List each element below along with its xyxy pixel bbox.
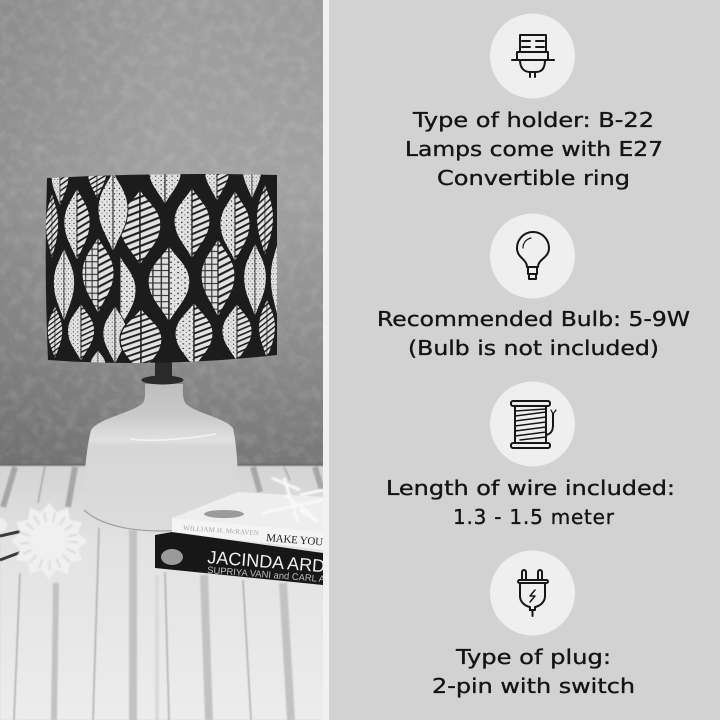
icon: wire spool [490, 382, 575, 466]
icon: light bulb [490, 214, 575, 298]
icon: lamp holder [490, 14, 575, 98]
text: wire length: Length of wire included: [386, 476, 675, 500]
spec: holder [405, 14, 663, 190]
photo: lamp on a striped table [0, 0, 326, 720]
white book with title: WILLIAM H. McRAVEN [183, 524, 259, 537]
white separator strip [323, 0, 329, 720]
dried sprig on the book [262, 478, 323, 522]
text: plug type: 2-pin with switch [432, 674, 635, 698]
lamp stem [155, 360, 172, 378]
white book with title: MAKE YOU [266, 532, 324, 548]
black book with title [155, 532, 326, 585]
text: holder type: Convertible ring [437, 166, 630, 190]
text: plug type [432, 645, 635, 698]
spec: plug [432, 550, 635, 698]
striped tablecloth [0, 464, 324, 720]
text: recommended bulb [377, 307, 690, 360]
white flower [0, 503, 87, 579]
text: wire length: 1.3 - 1.5 meter [453, 505, 615, 529]
text: holder type [405, 108, 663, 190]
text: plug type: Type of plug: [455, 645, 611, 669]
black book with title: SUPRIYA VANI and CARL A [207, 565, 326, 585]
white book with title [172, 492, 324, 550]
text: holder type: Lamps come with E27 [405, 137, 663, 161]
text: recommended bulb: Recommended Bulb: 5-9W [377, 307, 690, 331]
spec: bulb [377, 214, 690, 360]
spec: wire [386, 382, 675, 529]
lamp collar [142, 376, 184, 384]
text: wire length [386, 476, 675, 529]
text: holder type: Type of holder: B-22 [412, 108, 654, 132]
black book with title: JACINDA ARD [207, 547, 326, 576]
text: recommended bulb: (Bulb is not included) [408, 336, 659, 360]
right panel background [329, 0, 720, 720]
wall background [0, 0, 324, 466]
lamp ceramic base [84, 384, 238, 531]
patterned drum lampshade [46, 174, 277, 363]
icon: two-pin plug [490, 550, 575, 636]
flower stems [0, 531, 24, 560]
